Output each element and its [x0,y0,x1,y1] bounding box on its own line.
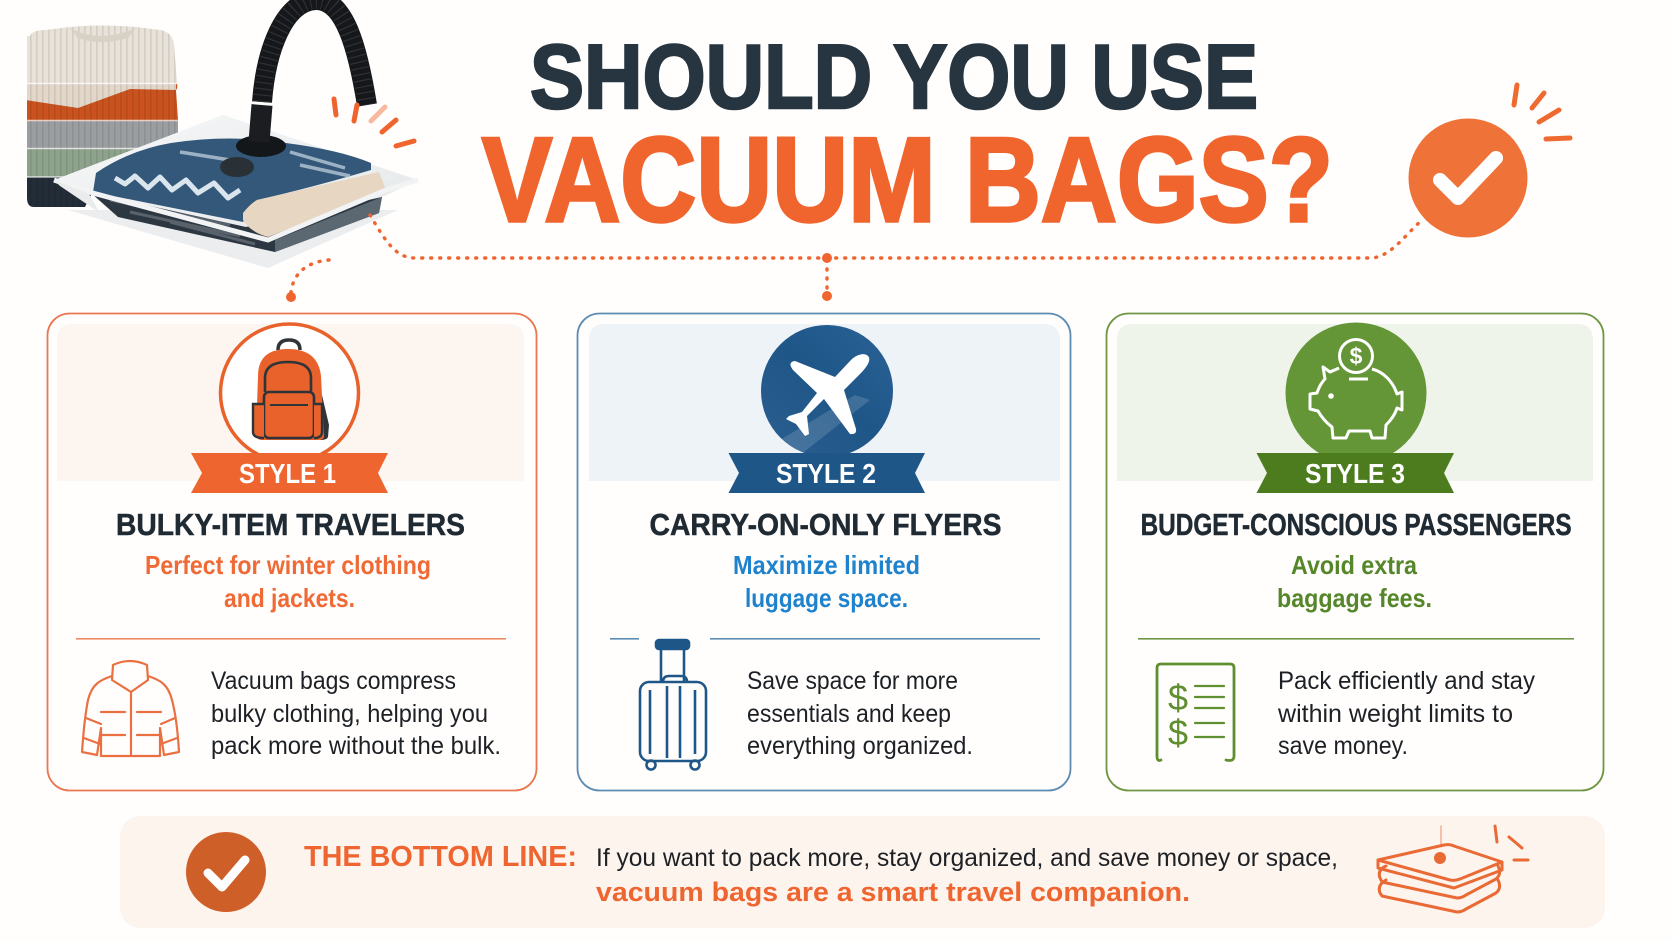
title: VACUUM BAGS? [482,113,1333,247]
tagline: Maximize limited [733,550,920,580]
tagline [733,550,920,613]
heading: BULKY-ITEM TRAVELERS [116,507,465,542]
icon: puffer jacket [82,661,179,756]
body text [747,667,973,760]
body text: everything organized. [747,732,973,760]
body text: pack more without the bulk. [211,732,501,760]
icon: piggy bank [1286,322,1426,464]
icon: hose suction rays [334,99,414,146]
body text: Vacuum bags compress [211,667,456,695]
icon: receipt: $ [1168,712,1188,753]
icon: stacked vacuum bags [1378,826,1528,912]
ribbon: style 3 [1256,453,1454,493]
body text: within weight limits to [1277,700,1513,728]
connector dots [286,253,832,302]
connector: dotted path from bag to badge [291,215,1422,292]
body text [211,667,501,760]
body text: bulky clothing, helping you [211,700,488,728]
tagline [145,550,431,613]
ribbon: style 2 [728,453,925,493]
tagline: baggage fees. [1277,583,1432,613]
ribbon: style 1 [191,453,388,493]
summary text: If you want to pack more, stay organized, and save money or space, [596,844,1338,872]
icon: backpack [220,324,358,462]
tagline: and jackets. [224,583,355,613]
icon: airplane [761,325,893,457]
ribbon: style 3: STYLE 3 [1305,458,1405,489]
body text: Pack efficiently and stay [1278,667,1535,695]
panel: style 3 budget-conscious passengers [1106,314,1604,790]
title [482,27,1333,247]
title: SHOULD YOU USE [530,27,1258,128]
icon: receipt: $ [1168,677,1188,718]
heading: CARRY-ON-ONLY FLYERS [650,507,1002,542]
tagline: Perfect for winter clothing [145,550,431,580]
tagline [1277,550,1432,613]
body text: save money. [1278,732,1408,760]
icon: suitcase [640,640,706,770]
icon: receipt [1157,664,1234,760]
summary text [596,844,1338,907]
label: the bottom line: THE BOTTOM LINE: [304,841,577,873]
ribbon: style 1: STYLE 1 [239,458,336,489]
summary text: vacuum bags are a smart travel companion. [596,877,1190,907]
tagline: luggage space. [745,583,908,613]
panel: bottom line [120,816,1605,928]
ribbon: style 2: STYLE 2 [776,458,876,489]
body text [1277,667,1535,760]
tagline: Avoid extra [1291,550,1417,580]
icon: orange check badge [1408,85,1570,238]
illustration: vacuum bag with hose [54,0,418,268]
icon: bottom check badge [186,832,266,912]
panel: style 1 bulky-item travelers [48,314,536,790]
illustration: folded sweaters stack [25,25,180,209]
icon: piggy bank: $ [1350,343,1363,369]
body text: essentials and keep [747,700,951,728]
body text: Save space for more [747,667,958,695]
panel: style 2 carry-on-only flyers [578,314,1070,790]
